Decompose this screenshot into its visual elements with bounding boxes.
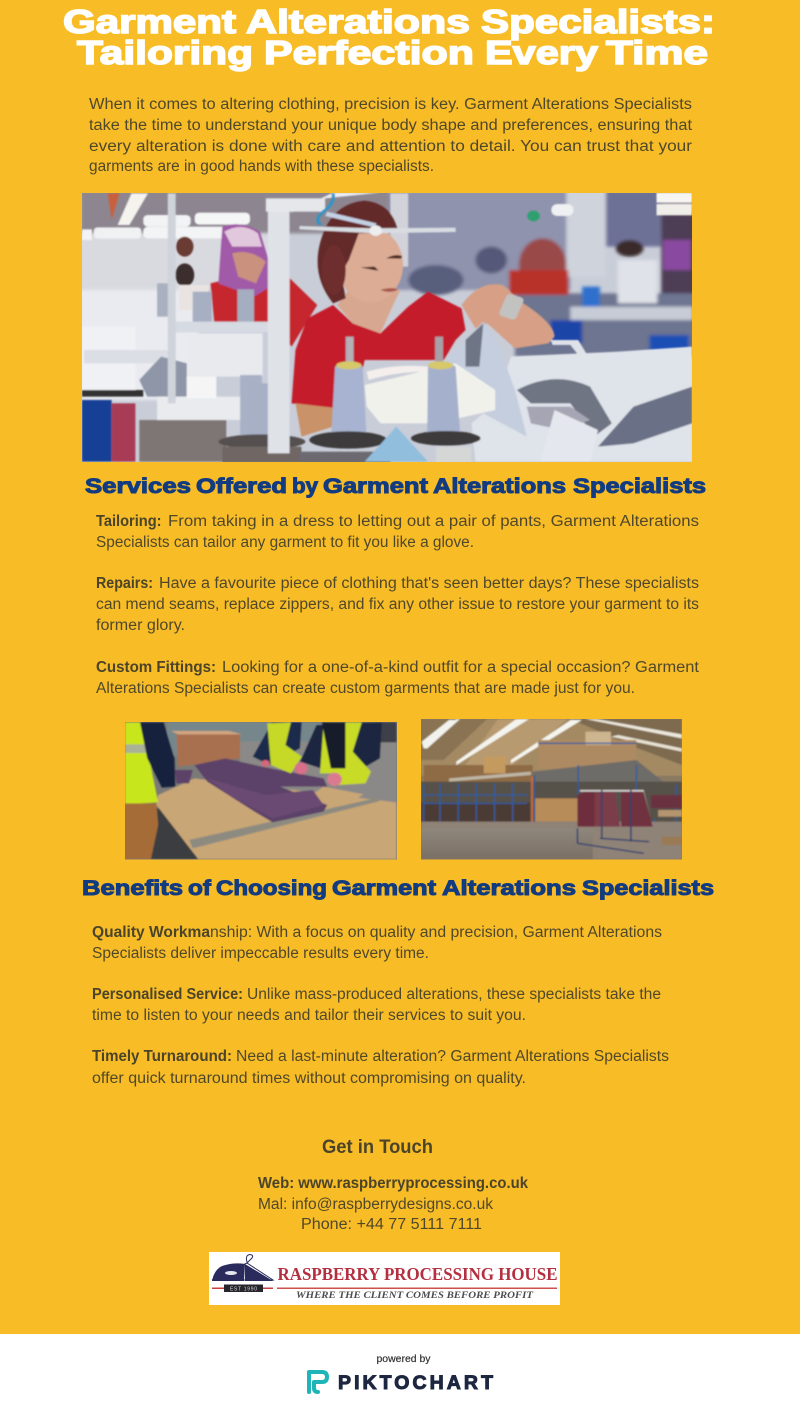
contact details: Web: www.raspberryprocessing.co.uk [258,1175,528,1192]
intro paragraph: garments are in good hands with these specialists. [89,158,434,175]
main worker shirt [292,292,466,410]
heading: benefits: Choosing [216,877,327,900]
vertical posts [168,193,176,403]
heading: benefits: Specialists [582,877,714,900]
benefits list [92,924,669,1087]
cardboard box [176,733,240,767]
service: tailoring: Tailoring: [96,513,162,530]
icon: iron and hanger: EST 1990 [230,1286,257,1292]
service: repairs: Have a favourite piece of clothing that's seen better days? These specialists [159,575,699,592]
service: tailoring: Specialists can tailor any garment to fit you like a glove. [96,534,474,551]
contact details: Mal: info@raspberrydesigns.co.uk [258,1196,493,1213]
heading: services: Alterations [433,475,566,498]
logo tagline: WHERE THE CLIENT COMES BEFORE PROFIT [296,1291,534,1301]
powered by: powered by [376,1354,430,1365]
title: Garment [63,3,236,40]
benefit: timely turnaround: Timely Turnaround: [92,1048,232,1065]
benefit: quality workmanship: nship: With a focus on quality and precision, Garment Alterations [210,924,662,941]
logo name: RASPBERRY PROCESSING HOUSE [278,1264,558,1284]
foreground spools [331,362,367,438]
title: Specialists: [481,3,715,40]
background workers [517,236,568,273]
photo: workers handling packed garments [125,722,397,860]
heading: services: Offered [196,475,287,498]
heading: services [85,475,706,498]
heading: benefits: Alterations [442,877,576,900]
board [156,778,396,859]
intro paragraph: every alteration is done with care and attention to detail. You can trust that your [89,138,692,155]
title: Tailoring [77,34,253,71]
service: repairs [96,575,699,634]
floor [421,822,682,859]
benefit: personalised service: Unlike mass-produced alterations, these specialists take the [247,986,661,1003]
title [63,3,715,71]
footer band [0,1334,800,1414]
heading: services: Services [85,475,191,498]
benefit: timely turnaround: offer quick turnaround times without compromising on quality. [92,1070,526,1087]
title: Alterations [246,3,470,40]
intro paragraph: When it comes to altering clothing, precision is key. Garment Alterations Specialists [89,96,692,113]
benefit: quality workmanship: Specialists deliver impeccable results every time. [92,945,429,962]
garment packs [195,758,327,822]
arm and hand [462,284,554,348]
heading: benefits: of [188,877,212,900]
logo: Raspberry Processing House [209,1252,560,1305]
service: repairs: Repairs: [96,575,153,592]
service: custom fittings: Custom Fittings: [96,659,216,676]
hair [318,201,398,303]
benefit: personalised service: time to listen to your needs and tailor their services to suit you. [92,1007,526,1024]
roof [421,719,683,776]
title: Every [485,34,599,71]
title: Time [606,34,708,71]
benefit: quality workmanship: Quality Workma [92,924,210,941]
thread rack [299,226,456,233]
intro paragraph: take the time to understand your unique body shape and preferences, ensuring that [89,117,693,134]
service: repairs: former glory. [96,617,185,634]
heading: services: by [292,475,318,498]
service: tailoring: From taking in a dress to letting out a pair of pants, Garment Alterations [168,513,699,530]
footer: powered by Piktochart [309,1354,493,1394]
benefit: timely turnaround [92,1048,669,1087]
neck and face [337,290,400,333]
heading: benefits: Garment [332,877,436,900]
heading: benefits: Benefits [82,877,183,900]
photo: warehouse with garment rails [421,719,683,860]
service: custom fittings: Alterations Specialists can create custom garments that are made just for you. [96,680,635,697]
garment rails [577,791,596,827]
left table and cloth [82,327,135,392]
service: custom fittings: Looking for a one-of-a-kind outfit for a special occasion? Garment [222,659,700,676]
service: tailoring [96,513,699,551]
middle worker [253,722,302,765]
contact details [258,1175,528,1233]
heading: services: Specialists [573,475,706,498]
heading: benefits [82,877,714,900]
icon: iron and hanger [212,1254,273,1292]
ceiling lights [118,193,148,225]
contact heading: Get in Touch [322,1136,433,1158]
benefit: quality workmanship [92,924,662,962]
Piktochart wordmark: PIKTOCHART [338,1372,493,1394]
service: custom fittings [96,659,700,697]
background machine and spools [157,283,171,317]
lower storage [421,782,682,823]
heading: services: Garment [323,475,428,498]
photo: garment factory worker at sewing machine [80,190,697,463]
title: Perfection [264,34,474,71]
service: repairs: can mend seams, replace zippers, and fix any other issue to restore your garment to its [96,596,699,613]
ceiling and far background [80,190,697,233]
left worker [125,722,158,804]
services list [96,513,700,697]
foreground cloth pile [471,347,692,462]
mezzanine stock [424,765,533,782]
benefit: personalised service: Personalised Service: [92,986,243,1003]
foreground sewing machine [365,363,495,423]
right worker [300,722,382,769]
second woman [210,278,318,348]
benefit: personalised service [92,986,661,1024]
icon: Piktochart mark [309,1372,327,1392]
intro paragraph [89,96,693,175]
contact details: Phone: +44 77 5111 7111 [301,1216,482,1233]
benefit: timely turnaround: Need a last-minute alteration? Garment Alterations Specialists [236,1048,669,1065]
